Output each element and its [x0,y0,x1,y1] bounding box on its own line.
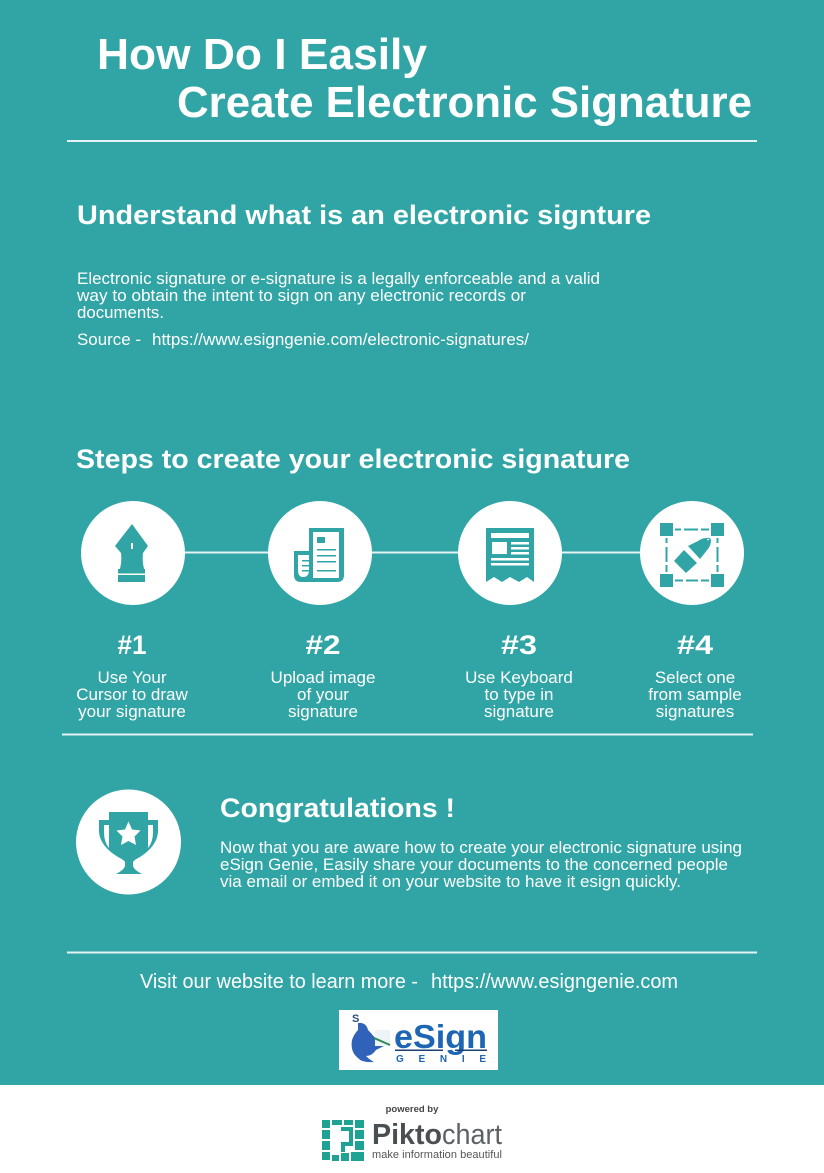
text block: congratulations [220,838,742,891]
logo: eSign Genie [339,1010,498,1070]
icon: receipt article [458,501,562,605]
step 2: #2 [306,630,340,660]
icon: pen nib [81,501,185,605]
step 3: signature [484,702,554,721]
heading: understand: Understand what is an electronic signture [77,200,651,230]
step 3: #3 [501,630,537,660]
step 2: signature [288,702,358,721]
step 1: your signature [78,702,186,721]
logo: eSign Genie: S [352,1013,359,1025]
text block: congratulations: eSign Genie, Easily share your documents to the concerned people [220,855,728,874]
heading: congratulations: Congratulations ! [220,793,455,823]
call to action [140,971,678,993]
text block: definition: documents. [77,303,164,322]
step 4: from sample [648,685,742,704]
step 2: of your [297,685,349,704]
step 4 [648,630,742,721]
step 4: #4 [677,630,713,660]
logo: eSign Genie: eSign [394,1018,487,1055]
logo: powered by Piktochart: make information beautiful [372,1149,502,1161]
logo: eSign Genie: GENIE [396,1054,486,1065]
call to action: Visit our website to learn more - [140,971,418,993]
logo: powered by Piktochart [322,1104,502,1161]
text block: definition: way to obtain the intent to sign on any electronic records or [76,286,526,305]
step 2 [271,630,375,721]
step 1 [76,630,188,721]
logo: powered by Piktochart: Pikto [372,1119,442,1151]
text block: definition: Source - [77,330,141,349]
title: How Do I Easily [97,30,428,79]
step 2: Upload image [271,668,375,687]
icon: paint brush selection [640,501,744,605]
step 4: signatures [656,702,734,721]
step 1: #1 [118,630,146,660]
text block: definition: Electronic signature or e-signature is a legally enforceable and a valid [77,269,600,288]
title: Create Electronic Signature [177,78,752,127]
icon: documents [268,501,372,605]
heading: steps: Steps to create your electronic signature [76,444,630,474]
step 1: Cursor to draw [76,685,188,704]
icon: trophy [76,790,181,894]
text block: definition [76,269,600,349]
text block: congratulations: Now that you are aware how to create your electronic signature using [220,838,742,857]
step 1: Use Your [98,668,167,687]
title [97,30,752,127]
step 3 [465,630,573,721]
text block: definition: https://www.esigngenie.com/electronic-signatures/ [152,330,529,349]
text block: congratulations: via email or embed it on your website to have it esign quickly. [220,872,681,891]
step 3: Use Keyboard [465,668,573,687]
step 4: Select one [655,668,735,687]
step 3: to type in [484,685,554,704]
logo: powered by Piktochart: powered by [386,1104,439,1115]
logo: powered by Piktochart: chart [442,1119,502,1151]
call to action: https://www.esigngenie.com [431,971,678,993]
